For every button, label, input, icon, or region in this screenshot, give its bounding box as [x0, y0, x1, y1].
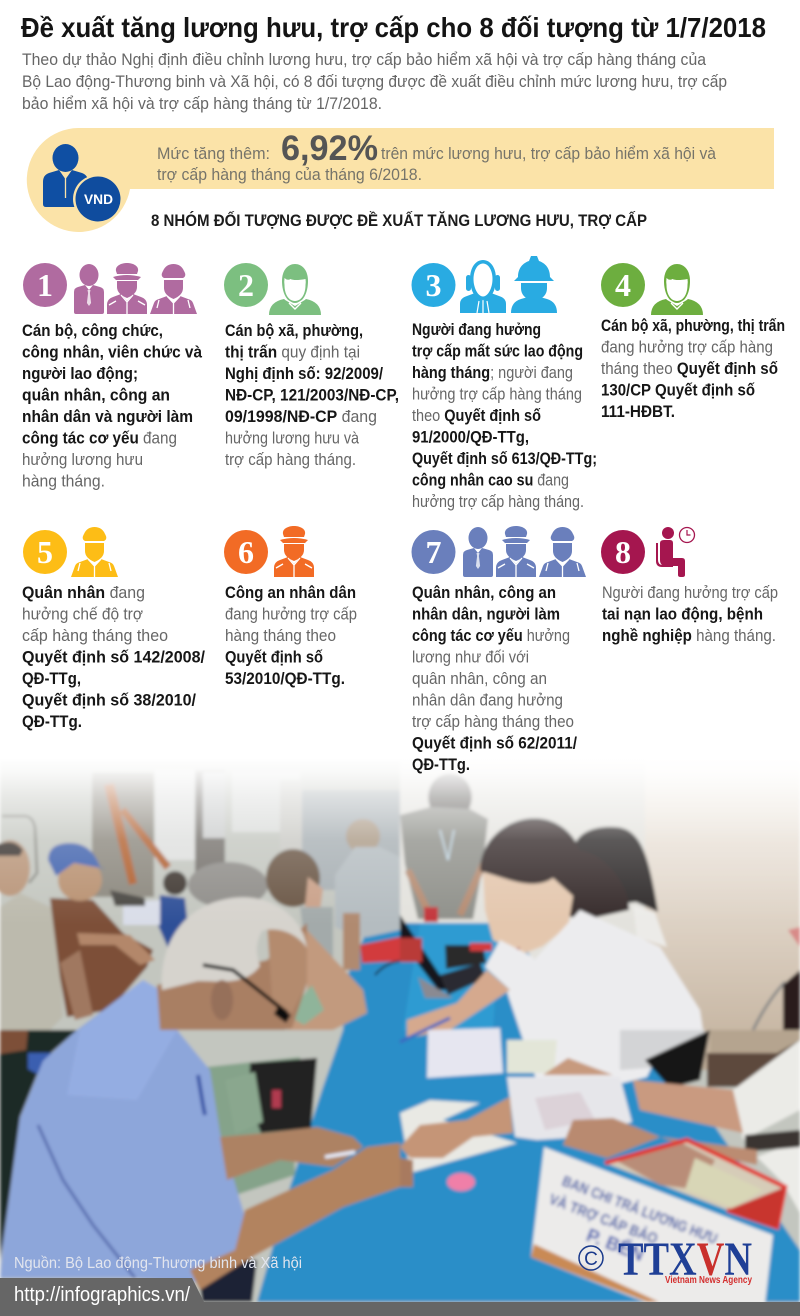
text: nhân dân, người làm — [412, 606, 560, 624]
person in blue behind — [157, 895, 188, 948]
text: đang hưởng trợ cấp — [225, 606, 357, 624]
text: quân nhân, công an — [22, 386, 170, 404]
badge 8 — [601, 530, 645, 574]
text — [412, 584, 577, 774]
photo: pension payment desk — [0, 755, 800, 1305]
text: hưởng lương hưu — [22, 451, 143, 469]
far hand and sleeve — [287, 930, 367, 1030]
man in blue cap — [48, 843, 155, 1020]
papers and cup — [427, 1028, 503, 1078]
footer bar and url tab: http://infographics.vn/ — [14, 1284, 190, 1306]
badge 5 — [23, 530, 67, 574]
intro paragraph: Bộ Lao động-Thương binh và Xã hội, có 8 đối tượng được đề xuất điều chỉnh mức lương hưu, trợ cấp — [22, 72, 727, 91]
shutters and pipes — [92, 770, 302, 897]
text: Quân nhân, công an — [412, 584, 556, 602]
text: 09/1998/NĐ-CP đang — [225, 408, 377, 426]
pink lid — [447, 1173, 475, 1191]
old man arms — [220, 1127, 363, 1180]
icons: civil servant, police, soldier — [74, 263, 197, 314]
text — [602, 584, 778, 645]
badge 4 — [601, 263, 645, 307]
text: cấp hàng tháng theo — [22, 627, 168, 645]
text: Công an nhân dân — [225, 584, 356, 602]
old man head — [157, 897, 307, 1030]
icons: office worker, construction worker — [460, 256, 557, 313]
text: tháng theo Quyết định số — [601, 360, 778, 378]
badge 6 — [224, 530, 268, 574]
group 8 — [601, 527, 778, 645]
sign board: P. BẾN — [583, 1224, 647, 1266]
basket of money — [605, 1140, 785, 1227]
badge 7 — [412, 530, 456, 574]
text: 53/2010/QĐ-TTg. — [225, 670, 345, 688]
old man shirt — [0, 980, 247, 1283]
text: QĐ-TTg. — [412, 756, 470, 774]
main woman — [400, 818, 710, 1092]
text: hưởng lương hưu và — [225, 430, 360, 448]
text: hàng tháng. — [22, 472, 105, 490]
intro paragraph: bảo hiểm xã hội và trợ cấp hàng tháng từ 1/7/2018. — [22, 94, 382, 113]
document held — [507, 1077, 632, 1140]
text: Quyết định số 62/2011/ — [412, 734, 577, 752]
group 3 — [412, 256, 597, 511]
badge 1: 1 — [37, 267, 53, 303]
text: quân nhân, công an — [412, 670, 547, 688]
group 6 — [224, 526, 357, 688]
sign board: VÀ TRỢ CẤP BẢO — [547, 1191, 660, 1248]
text: công nhân cao su đang — [412, 472, 569, 490]
badge 3 — [412, 263, 456, 307]
woman in pattern dress — [400, 773, 488, 922]
text: Quyết định số — [225, 648, 323, 666]
text: Người đang hưởng trợ cấp — [602, 584, 778, 602]
text: công tác cơ yếu đang — [22, 430, 177, 448]
table — [257, 923, 800, 1302]
text — [412, 321, 597, 511]
icon: commune official — [651, 264, 703, 315]
text: tai nạn lao động, bệnh — [602, 606, 763, 624]
text — [601, 317, 785, 421]
text — [225, 584, 357, 688]
watermark: TTXVN: C — [584, 1249, 598, 1270]
banner: 6.92% increase — [27, 128, 774, 232]
old man green vest — [207, 1057, 300, 1197]
gray haired person — [188, 862, 268, 908]
red tray — [360, 937, 400, 963]
white blouse — [507, 910, 703, 1092]
text: hưởng chế độ trợ — [22, 606, 143, 624]
text: 111-HĐBT. — [601, 403, 675, 421]
text: theo Quyết định số — [412, 407, 541, 425]
right floor, chair, sleeve — [710, 1030, 800, 1080]
text: lương như đối với — [412, 648, 529, 666]
text: Quyết định số 613/QĐ-TTg; — [412, 450, 597, 468]
badge 2 — [224, 263, 268, 307]
text: QĐ-TTg. — [22, 713, 82, 731]
watermark: TTXVN: TTXVN — [618, 1233, 752, 1286]
text — [22, 322, 203, 490]
pants — [200, 1260, 257, 1302]
text — [22, 584, 205, 731]
text: hưởng trợ cấp hàng tháng. — [412, 493, 584, 511]
badge 8: 8 — [615, 534, 631, 570]
group 4 — [601, 263, 785, 421]
watermark: TTXVN: Vietnam News Agency — [665, 1275, 752, 1286]
intro paragraph — [22, 50, 727, 113]
badge 6: 6 — [238, 534, 254, 570]
footer bar and url tab — [0, 1278, 800, 1316]
text: Nghị định số: 92/2009/ — [225, 365, 383, 383]
badge 7: 7 — [426, 534, 442, 570]
source line: Nguồn: Bộ Lao động-Thương binh và Xã hội — [14, 1255, 302, 1272]
text: Người đang hưởng — [412, 321, 541, 339]
banner text: Mức tăng thêm: — [157, 144, 270, 163]
text: công tác cơ yếu hưởng — [412, 627, 570, 645]
arm with pen — [407, 970, 510, 1038]
banner text — [157, 129, 716, 184]
icon: police officer — [274, 526, 314, 577]
text: QĐ-TTg, — [22, 670, 81, 688]
walls — [400, 760, 650, 1060]
laptop — [400, 915, 486, 998]
text: Quân nhân đang — [22, 584, 145, 602]
intro paragraph: Theo dự thảo Nghị định điều chỉnh lương hưu, trợ cấp bảo hiểm xã hội và trợ cấp hàng tháng của — [22, 50, 707, 69]
text: Cán bộ, công chức, — [22, 322, 163, 340]
text — [225, 322, 399, 469]
sign board: BAN CHI TRẢ LƯƠNG HƯU — [560, 1173, 720, 1248]
icon: person with VND coin: VND — [84, 191, 113, 207]
icon: soldier — [71, 527, 118, 577]
sign board — [531, 1147, 773, 1304]
text: đang hưởng trợ cấp hàng — [601, 338, 773, 356]
banner text: 6,92% — [281, 129, 378, 168]
text: 91/2000/QĐ-TTg, — [412, 428, 529, 446]
hands — [400, 1097, 513, 1158]
text: NĐ-CP, 121/2003/NĐ-CP, — [225, 386, 399, 404]
badge 2: 2 — [238, 267, 254, 303]
text: nhân dân đang hưởng — [412, 692, 563, 710]
text: nghề nghiệp hàng tháng. — [602, 627, 776, 645]
badge 1 — [23, 263, 67, 307]
woman behind — [573, 827, 658, 912]
text: nhân dân và người làm — [22, 408, 193, 426]
group 7 — [412, 526, 586, 774]
text: trợ cấp hàng tháng theo — [412, 713, 574, 731]
woman short hair — [266, 849, 320, 907]
text: hưởng trợ cấp hàng tháng — [412, 386, 582, 404]
icon: seated person with clock — [656, 527, 694, 577]
text: công nhân, viên chức và — [22, 344, 203, 362]
banner text: trên mức lương hưu, trợ cấp bảo hiểm xã hội và — [381, 144, 716, 163]
badge 4: 4 — [615, 267, 631, 303]
badge 5: 5 — [37, 534, 53, 570]
section heading: 8 NHÓM ĐỐI TƯỢNG ĐƯỢC ĐỀ XUẤT TĂNG LƯƠNG HƯU, TRỢ CẤP — [151, 210, 647, 230]
group 2 — [224, 263, 399, 469]
badge 3: 3 — [426, 267, 442, 303]
icon: commune official — [269, 264, 321, 315]
icon: person with VND coin — [43, 144, 121, 223]
text: trợ cấp mất sức lao động — [412, 342, 583, 360]
group 5 — [22, 527, 205, 731]
icons: civil servant, police, soldier — [463, 526, 586, 577]
text: trợ cấp hàng tháng. — [225, 451, 356, 469]
text: hàng tháng theo — [225, 627, 336, 645]
text: Quyết định số 38/2010/ — [22, 692, 196, 710]
text: 130/CP Quyết định số — [601, 382, 755, 400]
text: người lao động; — [22, 365, 138, 383]
group 1 — [22, 263, 203, 490]
left seated man — [0, 840, 83, 1260]
text: hàng tháng; người đang — [412, 364, 573, 382]
text: Quyết định số 142/2008/ — [22, 648, 205, 666]
banner text: trợ cấp hàng tháng của tháng 6/2018. — [157, 165, 422, 184]
mirror — [2, 816, 37, 883]
text: thị trấn quy định tại — [225, 344, 360, 362]
man in gray shirt — [346, 819, 380, 853]
text: Cán bộ xã, phường, — [225, 322, 363, 340]
